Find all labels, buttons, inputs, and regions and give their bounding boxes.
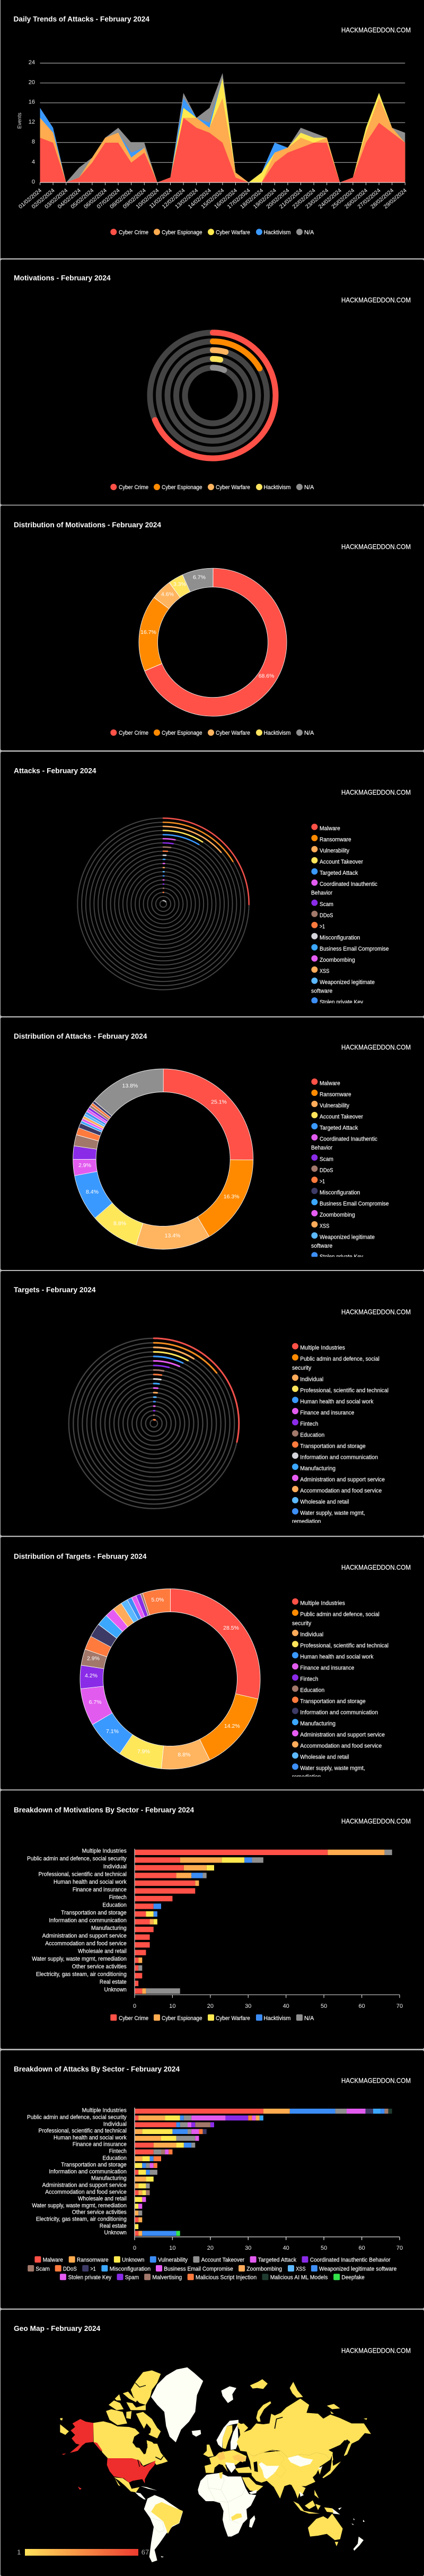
bars [135,2109,392,2236]
x axis date labels: 04/02/2024 [57,187,82,210]
stacked bar chart [27,1848,403,2009]
legend: Vulnerability [320,1102,349,1109]
sector labels: Electricity, gas steam, air conditioning [36,2216,127,2223]
x axis date labels: 01/02/2024 [17,187,43,210]
donut chart [73,1069,253,1249]
legend: Fintech [300,1421,318,1427]
x axis date labels: 08/02/2024 [109,187,134,210]
sector labels: Other service activities [72,2209,127,2216]
y axis labels: 16 [29,99,35,106]
sector labels: Human health and social work [54,1879,127,1885]
source label: HACKMAGEDDON.COM [341,2347,411,2355]
legend: Vulnerability [320,848,349,854]
legend: Zoombombing [320,957,355,963]
donut chart: 6.7% [89,1699,102,1705]
sector labels: Finance and insurance [73,1886,127,1893]
legend: Professional, scientific and technical [300,1643,388,1649]
sector labels: Wholesale and retail [78,1948,127,1955]
legend: Business Email Compromise [320,946,389,952]
legend: Weaponized legitimate [320,979,375,986]
legend: Information and communication [300,1710,378,1716]
legend: Cyber Crime [119,484,148,491]
axes [135,1849,400,1998]
legend: Misconfiguration [110,2266,151,2272]
legend: security [292,1620,312,1626]
title: Targets - February 2024 [14,1285,96,1294]
legend: Misconfiguration [320,935,360,941]
legend: Behavior [311,1145,333,1151]
donut chart: 16.7% [140,629,156,636]
legend: Hacktivism [263,230,290,236]
legend: Malware [320,1080,340,1086]
y axis labels [29,59,35,185]
x axis date labels: 20/02/2024 [265,187,290,210]
legend: DDoS [320,912,333,919]
x axis labels: 0 [133,2003,136,2009]
legend: Coordinated Inauthentic [320,1136,377,1142]
donut chart: 2.9% [78,1162,91,1169]
sector labels: Education [102,1902,127,1908]
legend: Multiple Industries [300,1345,345,1351]
x axis date labels: 23/02/2024 [304,187,330,210]
legend: N/A [304,2015,314,2022]
color scale legend: 67 [142,2548,149,2556]
panel: distribution of attacks [1,1017,424,1270]
sector labels: Individual [103,2121,127,2127]
x axis labels: 70 [396,2245,403,2251]
legend: Ransomware [320,837,351,843]
legend: >1 [320,1178,325,1185]
donut chart [80,1589,260,1769]
x axis labels [133,2003,403,2009]
legend: Cyber Crime [119,730,148,736]
legend: Stolen private Key [320,999,363,1005]
legend: Ransomware [77,2257,109,2264]
y axis labels: 12 [29,119,35,125]
panel: daily trends of attacks [1,0,424,258]
x axis labels: 10 [169,2245,176,2251]
sector labels: Professional, scientific and technical [38,1871,127,1877]
title: Distribution of Targets - February 2024 [14,1552,147,1560]
legend: Transportation and storage [300,1699,366,1705]
legend: Hacktivism [263,2015,290,2022]
sector labels: Information and communication [49,2169,127,2175]
legend: Targeted Attack [258,2257,297,2264]
x axis date labels: 14/02/2024 [187,187,213,210]
panel: distribution of targets [1,1537,424,1789]
legend: Finance and insurance [300,1665,354,1672]
x axis date labels: 26/02/2024 [343,187,369,210]
x axis labels: 50 [321,2003,327,2009]
legend: N/A [304,484,314,491]
legend: Finance and insurance [300,1409,354,1416]
x axis date labels: 10/02/2024 [135,187,160,210]
legend: Cyber Warfare [216,730,250,736]
sector labels: Transportation and storage [61,1910,127,1916]
legend: Scam [320,1156,333,1162]
map: eurasia [203,2379,371,2499]
panel: breakdown of attacks by sector [1,2050,424,2309]
legend: Education [300,1687,324,1694]
donut chart: 4.6% [161,591,174,597]
x axis date labels: 29/02/2024 [383,187,408,210]
stacked bar chart [27,2108,403,2251]
source label: HACKMAGEDDON.COM [341,26,411,34]
y axis labels: 0 [32,179,35,185]
legend: Deepfake [341,2275,365,2281]
legend: Coordinated Inauthentic [320,881,377,887]
legend: Administration and support service [300,1732,385,1738]
donut chart: 8.8% [113,1220,126,1226]
legend: Hacktivism [263,730,290,736]
legend: Business Email Compromise [320,1200,389,1207]
x axis labels: 20 [207,2245,214,2251]
donut chart: 3.3% [173,581,186,588]
legend: Stolen private Key [320,1254,363,1260]
donut chart: 4.2% [85,1673,98,1679]
x axis date labels: 24/02/2024 [317,187,343,210]
legend [110,2014,314,2022]
donut chart: 2.9% [87,1656,100,1662]
legend: remediation [292,1774,321,1780]
legend: Professional, scientific and technical [300,1387,388,1394]
bars [135,1850,392,1994]
legend: Transportation and storage [300,1443,366,1449]
legend [311,1078,389,1260]
x axis labels: 60 [358,2003,365,2009]
legend: Targeted Attack [320,870,358,876]
x axis date labels: 15/02/2024 [200,187,225,210]
legend: Cyber Warfare [216,230,250,236]
sector labels [27,1848,127,1993]
x axis date labels: 16/02/2024 [213,187,238,210]
radial bar chart [69,1338,239,1509]
x axis date labels [17,187,408,210]
legend: Malicious AI ML Models [270,2275,328,2281]
legend: Weaponized legitimate [320,1234,375,1240]
sector labels: Fintech [109,1894,127,1901]
legend: >1 [90,2266,96,2272]
x axis labels: 40 [283,2003,289,2009]
sector labels: Fintech [109,2148,127,2155]
x axis date labels: 27/02/2024 [357,187,382,210]
source label: HACKMAGEDDON.COM [341,1043,411,1051]
donut chart: 5.0% [151,1597,164,1603]
panel: motivations [1,259,424,505]
legend [110,729,314,736]
source label: HACKMAGEDDON.COM [341,1563,411,1571]
legend: Ransomware [320,1091,351,1098]
x axis date labels: 18/02/2024 [239,187,264,210]
x axis date labels: 22/02/2024 [292,187,317,210]
legend: Stolen private Key [68,2275,112,2281]
legend: Administration and support service [300,1476,385,1483]
x axis labels: 20 [207,2003,214,2009]
x axis date labels: 21/02/2024 [278,187,304,210]
legend: Individual [300,1632,323,1638]
area chart [17,59,408,210]
color scale legend: 1 [17,2548,21,2556]
legend: Business Email Compromise [164,2266,233,2272]
x axis date labels: 12/02/2024 [161,187,187,210]
sector labels: Public admin and defence, social security [27,1856,127,1862]
sector labels: Wholesale and retail [78,2196,127,2202]
legend: Misconfiguration [320,1189,360,1196]
x axis date labels: 28/02/2024 [369,187,395,210]
legend [110,229,314,236]
legend: Human health and social work [300,1654,374,1660]
radial bar chart [150,333,276,458]
legend: XSS [296,2266,306,2272]
x axis labels: 30 [245,2003,251,2009]
legend: Wholesale and retail [300,1754,349,1761]
donut chart: 7.1% [106,1728,119,1735]
legend: N/A [304,730,314,736]
sector labels: Finance and insurance [73,2142,127,2148]
sector labels: Administration and support service [42,2182,127,2189]
x axis date labels: 02/02/2024 [31,187,56,210]
color scale legend [17,2548,149,2556]
legend: Information and communication [300,1454,378,1460]
panel: breakdown of motivations by sector [1,1790,424,2049]
radial bar chart [77,818,249,990]
legend: Human health and social work [300,1398,374,1405]
legend: Cyber Espionage [162,2015,202,2022]
sector labels: Human health and social work [54,2135,127,2141]
legend: Cyber Crime [119,2015,148,2022]
legend: Malware [43,2257,63,2264]
legend: Behavior [311,890,333,897]
x axis date labels: 05/02/2024 [69,187,95,210]
y axis labels: 4 [32,159,35,165]
donut chart: 7.9% [137,1748,150,1755]
donut chart: 14.2% [224,1723,240,1729]
y axis labels: 20 [29,79,35,85]
legend: security [292,1365,312,1371]
legend: Multiple Industries [300,1600,345,1606]
legend: Coordinated Inauthentic Behavior [310,2257,391,2264]
donut chart: 8.8% [178,1752,190,1758]
sector labels: Individual [103,1864,127,1870]
x axis labels: 70 [396,2003,403,2009]
y axis labels: 24 [29,59,35,66]
sector labels: Accommodation and food service [45,1940,127,1947]
title: Distribution of Attacks - February 2024 [14,1032,147,1040]
legend: XSS [320,968,329,974]
map: the Americas and Greenland [60,2368,203,2500]
legend: Malvertising [152,2275,182,2281]
x axis labels [133,2245,403,2251]
donut chart: 25.1% [211,1099,227,1106]
legend: Cyber Espionage [162,484,202,491]
sector labels: Other service activities [72,1964,127,1970]
sector labels: Education [102,2155,127,2161]
sector labels: Unknown [104,1987,127,1993]
source label: HACKMAGEDDON.COM [341,1817,411,1825]
x axis labels: 30 [245,2245,251,2251]
legend: XSS [320,1223,329,1229]
title: Attacks - February 2024 [14,766,96,774]
legend: DDoS [63,2266,77,2272]
legend: Water supply, waste mgmt, [300,1510,365,1516]
panel: attacks [1,752,424,1016]
panel: geo map [1,2310,424,2576]
legend: Zoombombing [246,2266,282,2272]
legend: Cyber Espionage [162,230,202,236]
sector labels: Unknown [104,2230,127,2236]
legend: Vulnerability [158,2257,188,2264]
title: Geo Map - February 2024 [14,2324,100,2333]
sector labels: Real estate [100,1979,127,1986]
legend: Manufacturing [300,1721,335,1727]
source label: HACKMAGEDDON.COM [341,543,411,551]
title: Breakdown of Motivations By Sector - February 2024 [14,1806,194,1814]
map: africa, south america and oceania [144,2473,365,2562]
legend: DDoS [320,1167,333,1173]
sector labels: Multiple Industries [82,2108,127,2114]
sector labels: Accommodation and food service [45,2189,127,2195]
legend: Education [300,1432,324,1438]
x axis labels: 50 [321,2245,327,2251]
panel: distribution of motivations [1,506,424,750]
sector labels: Water supply, waste mgmt, remediation [32,2203,127,2209]
sector labels [27,2108,127,2236]
legend [28,2256,396,2281]
legend: Accommodation and food service [300,1743,382,1750]
donut chart [139,568,287,716]
x axis labels: 10 [169,2003,176,2009]
sector labels: Water supply, waste mgmt, remediation [32,1956,127,1962]
source label: HACKMAGEDDON.COM [341,788,411,796]
legend: Hacktivism [263,484,290,491]
sector labels: Real estate [100,2223,127,2229]
donut chart: 16.3% [224,1194,240,1200]
legend: Malicious Script Injection [196,2275,257,2281]
legend: software [311,1243,332,1249]
donut chart: 8.4% [86,1189,99,1195]
x axis date labels: 09/02/2024 [122,187,147,210]
sector labels: Public admin and defence, social security [27,2114,127,2121]
legend: Scam [36,2266,50,2272]
x axis date labels: 11/02/2024 [148,187,173,210]
donut chart: 28.5% [223,1625,239,1631]
sector labels: Professional, scientific and technical [38,2128,127,2134]
sector labels: Manufacturing [91,2175,127,2182]
legend: Account Takeover [320,1113,363,1120]
legend: Account Takeover [201,2257,245,2264]
x axis labels: 60 [358,2245,365,2251]
donut chart: 68.6% [259,673,274,679]
legend: N/A [304,230,314,236]
legend: Malware [320,825,340,832]
title: Breakdown of Attacks By Sector - February 2024 [14,2065,180,2073]
x axis date labels: 13/02/2024 [174,187,199,210]
x axis date labels: 06/02/2024 [83,187,108,210]
legend: Individual [300,1376,323,1382]
title: Daily Trends of Attacks - February 2024 [14,15,149,23]
legend [292,1598,388,1780]
x axis labels: 0 [133,2245,136,2251]
x axis date labels: 03/02/2024 [43,187,69,210]
x axis labels: 40 [283,2245,289,2251]
y axis title: Events [17,112,23,129]
legend: Wholesale and retail [300,1499,349,1505]
sector labels: Administration and support service [42,1933,127,1939]
legend: Cyber Crime [119,230,148,236]
world map [60,2368,371,2562]
legend: Cyber Warfare [216,2015,250,2022]
legend: Account Takeover [320,859,363,865]
x axis date labels: 07/02/2024 [96,187,121,210]
donut chart: 13.4% [165,1233,180,1239]
legend: >1 [320,924,325,930]
legend: remediation [292,1519,321,1525]
title: Distribution of Motivations - February 2024 [14,520,161,529]
sector labels: Electricity, gas steam, air conditioning [36,1971,127,1978]
legend: Targeted Attack [320,1125,358,1131]
legend: software [311,988,332,995]
source label: HACKMAGEDDON.COM [341,1308,411,1316]
x axis date labels: 25/02/2024 [330,187,356,210]
sector labels: Multiple Industries [82,1848,127,1855]
source label: HACKMAGEDDON.COM [341,296,411,304]
source label: HACKMAGEDDON.COM [341,2077,411,2085]
y axis labels: 8 [32,139,35,145]
legend: Manufacturing [300,1465,335,1472]
legend: Public admin and defence, social [300,1356,379,1362]
legend: Accommodation and food service [300,1487,382,1494]
legend: Zoombombing [320,1212,355,1218]
legend: Weaponized legitimate software [319,2266,396,2272]
legend: Spam [125,2275,139,2281]
axes [135,2108,400,2240]
legend: Public admin and defence, social [300,1611,379,1617]
panel: targets [1,1271,424,1536]
legend: Cyber Warfare [216,484,250,491]
legend [110,484,314,491]
title: Motivations - February 2024 [14,274,111,282]
legend: Cyber Espionage [162,730,202,736]
legend: Water supply, waste mgmt, [300,1765,365,1772]
legend [292,1343,388,1525]
legend: Scam [320,901,333,908]
legend: Unknown [122,2257,144,2264]
sector labels: Manufacturing [91,1925,127,1931]
x axis date labels: 17/02/2024 [226,187,252,210]
legend [311,824,389,1005]
donut chart: 6.7% [193,574,206,580]
sector labels: Information and communication [49,1917,127,1924]
donut chart: 13.8% [122,1083,138,1089]
legend: Fintech [300,1676,318,1683]
x axis date labels: 19/02/2024 [252,187,278,210]
sector labels: Transportation and storage [61,2162,127,2168]
